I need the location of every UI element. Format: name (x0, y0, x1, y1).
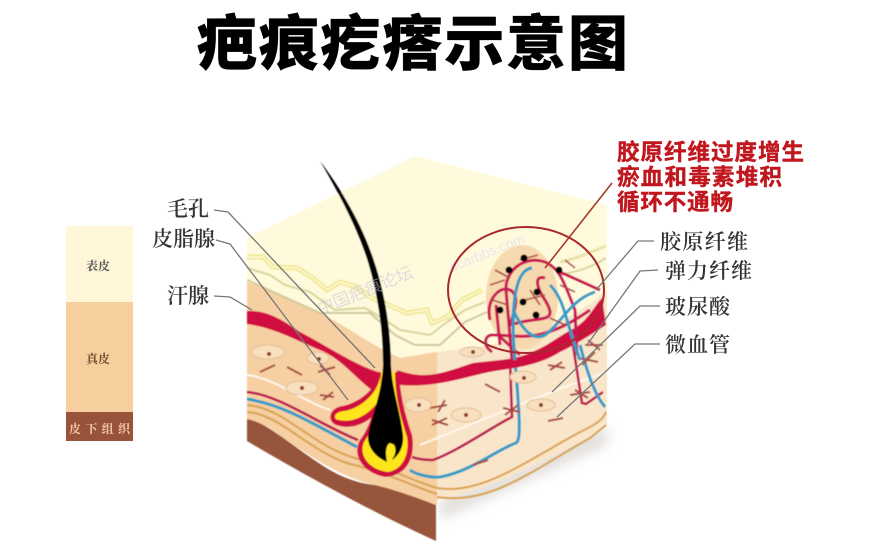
left labels: 毛孔 (167, 197, 209, 221)
callout text (617, 140, 804, 215)
right labels: 玻尿酸 (665, 295, 731, 319)
right labels: 微血管 (665, 333, 730, 357)
hair (320, 161, 403, 462)
capillary: blue and red lower vessels (247, 360, 519, 477)
scar bump (486, 245, 558, 349)
right labels: 弹力纤维 (665, 259, 752, 283)
title: 疤痕疙瘩示意图 (197, 11, 628, 78)
legend: skin layers: 皮下组织 (69, 421, 131, 436)
left labels (152, 197, 215, 308)
shadow (440, 425, 607, 520)
hair follicle (357, 372, 413, 477)
legend: skin layers (66, 226, 133, 441)
scar vessels (486, 260, 600, 360)
right leader lines (552, 241, 660, 417)
callout arrow (545, 183, 612, 268)
hypodermis (247, 419, 436, 541)
right labels (660, 230, 752, 357)
legend: skin layers: 表皮 (86, 258, 110, 273)
fat lines (247, 405, 437, 488)
sebaceous gland (330, 372, 380, 427)
epidermis wave lines (247, 257, 482, 323)
callout text: 胶原纤维过度增生 (617, 140, 804, 165)
main red vessel (247, 311, 380, 395)
dermis right face (437, 290, 607, 500)
left leader lines (214, 210, 375, 400)
callout text: 瘀血和毒素堆积 (617, 164, 782, 190)
dermis left face (247, 282, 437, 505)
epidermis surface (247, 156, 607, 400)
white lines (247, 372, 606, 445)
highlight circle (448, 227, 604, 353)
watermark: 中国疤痕论坛 (314, 263, 416, 319)
left labels: 皮脂腺 (152, 227, 215, 251)
legend: skin layers: 真皮 (86, 351, 110, 366)
left labels: 汗腺 (167, 284, 209, 308)
skin cube (247, 156, 607, 541)
callout text: 循环不通畅 (617, 190, 733, 215)
text: scarbbs.com (447, 230, 527, 275)
collagen and cells (260, 340, 603, 465)
right labels: 胶原纤维 (660, 230, 748, 254)
